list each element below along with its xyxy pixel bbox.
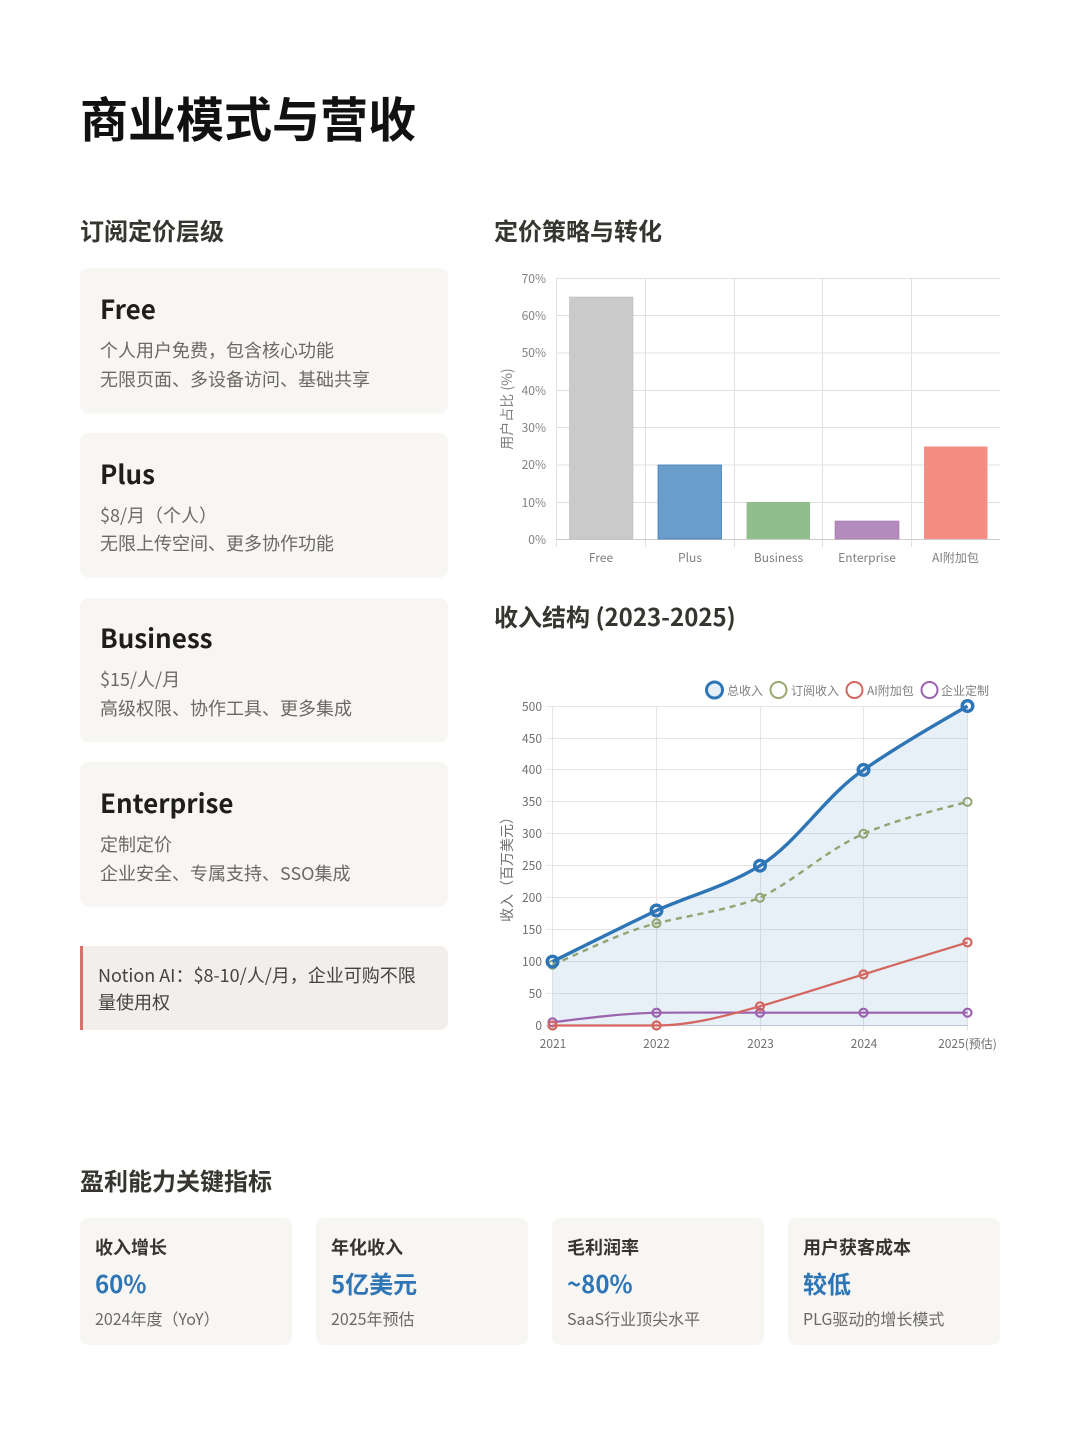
heading: revenue structure: 收入结构 (2023-2025) xyxy=(494,598,736,633)
panel: Enterprise tier: 企业安全、专属支持、SSO集成 xyxy=(100,860,351,886)
legend: 订阅收入 xyxy=(791,682,839,699)
x axis labels: 2021 xyxy=(540,1035,566,1052)
metric card: revenue growth: 60% xyxy=(95,1265,146,1300)
heading: subscription tiers: 订阅定价层级 xyxy=(80,212,224,247)
heading: pricing strategy: 定价策略与转化 xyxy=(494,212,662,247)
y axis labels: 500 xyxy=(522,698,542,715)
x axis labels xyxy=(589,549,979,566)
area: total revenue fill xyxy=(552,706,968,1026)
x axis labels: 2023 xyxy=(747,1035,774,1052)
y axis labels: 150 xyxy=(522,921,542,938)
metric card: acquisition cost xyxy=(788,1218,1000,1345)
y axis labels xyxy=(522,698,542,1034)
x axis labels: AI附加包 xyxy=(932,549,979,566)
x axis labels: Plus xyxy=(678,549,702,566)
metric card: gross margin: SaaS行业顶尖水平 xyxy=(567,1306,700,1330)
metric card: revenue growth xyxy=(80,1218,292,1345)
y axis labels xyxy=(522,270,546,548)
x axis labels: 2024 xyxy=(851,1035,878,1052)
panel: Business tier xyxy=(80,598,448,742)
x axis labels: Enterprise xyxy=(838,549,896,566)
panel: Business tier: $15/人/月 xyxy=(100,666,180,692)
panel: Plus tier: $8/月（个人） xyxy=(100,502,217,528)
panel: Free tier xyxy=(80,268,448,413)
y axis labels: 30% xyxy=(522,419,546,436)
metric card: gross margin xyxy=(552,1218,764,1345)
legend: 总收入 xyxy=(727,682,763,699)
panel: Enterprise tier xyxy=(80,762,448,906)
line chart: revenue xyxy=(497,680,997,1052)
series: enterprise custom xyxy=(548,1009,972,1026)
y axis labels: 0 xyxy=(535,1017,542,1034)
metric card: annualized revenue xyxy=(316,1218,528,1345)
x axis labels: Free xyxy=(589,549,613,566)
metric card: annualized revenue: 2025年预估 xyxy=(331,1306,415,1330)
panel: Business tier: Business xyxy=(100,619,213,656)
y axis labels: 60% xyxy=(522,307,546,324)
y axis labels: 400 xyxy=(522,761,542,778)
y axis labels: 250 xyxy=(522,857,542,874)
series: subscription revenue xyxy=(548,798,972,969)
series: total revenue xyxy=(547,701,973,967)
heading: profitability metrics: 盈利能力关键指标 xyxy=(80,1162,272,1197)
bar: Plus 20% xyxy=(658,465,722,539)
metric card: annualized revenue: 5亿美元 xyxy=(331,1265,417,1300)
panel: Plus tier: 无限上传空间、更多协作功能 xyxy=(100,530,334,556)
y axis labels: 10% xyxy=(522,494,546,511)
y axis labels: 200 xyxy=(522,889,542,906)
metric card: revenue growth: 收入增长 xyxy=(95,1234,167,1260)
panel: Enterprise tier: Enterprise xyxy=(100,784,234,821)
panel: Plus tier xyxy=(80,433,448,577)
metric card: acquisition cost: PLG驱动的增长模式 xyxy=(803,1306,944,1330)
y axis title: 收入（百万美元） xyxy=(497,810,517,922)
panel: Plus tier: Plus xyxy=(100,455,155,492)
metric card: gross margin: 毛利润率 xyxy=(567,1234,639,1260)
metric card: acquisition cost: 较低 xyxy=(803,1265,851,1300)
title: 商业模式与营收 xyxy=(80,81,416,151)
metric card: annualized revenue: 年化收入 xyxy=(331,1234,403,1260)
y axis title: 用户占比 (%) xyxy=(497,368,517,450)
x axis labels: 2025(预估) xyxy=(938,1035,997,1052)
metric card: revenue growth: 2024年度（YoY） xyxy=(95,1306,220,1330)
y axis labels: 350 xyxy=(522,793,542,810)
y axis labels: 40% xyxy=(522,382,546,399)
x axis labels: Business xyxy=(754,549,804,566)
panel: Free tier: 无限页面、多设备访问、基础共享 xyxy=(100,366,370,392)
y axis labels: 0% xyxy=(528,531,546,548)
callout: Notion AI: Notion AI：$8-10/人/月，企业可购不限量使用权 xyxy=(98,962,416,1015)
y axis labels: 300 xyxy=(522,825,542,842)
legend: 企业定制 xyxy=(941,682,989,699)
y axis labels: 50 xyxy=(529,985,542,1002)
bar: AI add-on 25% xyxy=(924,446,988,539)
y axis labels: 50% xyxy=(522,344,546,361)
bar: Free 65% xyxy=(570,297,633,539)
x axis labels: 2022 xyxy=(643,1035,670,1052)
metric card: acquisition cost: 用户获客成本 xyxy=(803,1234,911,1260)
callout: Notion AI xyxy=(80,946,448,1030)
series: AI add-on xyxy=(548,938,972,1030)
legend: AI附加包 xyxy=(867,682,914,699)
y axis labels: 20% xyxy=(522,456,546,473)
metric card: gross margin: ~80% xyxy=(567,1265,633,1300)
y axis labels: 70% xyxy=(522,270,546,287)
bar chart: user share by tier xyxy=(497,270,1000,566)
x axis labels xyxy=(540,1035,997,1052)
y axis labels: 100 xyxy=(522,953,542,970)
legend xyxy=(706,682,989,699)
panel: Free tier: Free xyxy=(100,290,156,327)
y axis labels: 450 xyxy=(522,730,542,747)
bar: Business 10% xyxy=(746,502,810,539)
panel: Business tier: 高级权限、协作工具、更多集成 xyxy=(100,695,352,721)
panel: Enterprise tier: 定制定价 xyxy=(100,831,172,857)
panel: Free tier: 个人用户免费，包含核心功能 xyxy=(100,337,334,363)
bar: Enterprise 5% xyxy=(835,521,899,539)
